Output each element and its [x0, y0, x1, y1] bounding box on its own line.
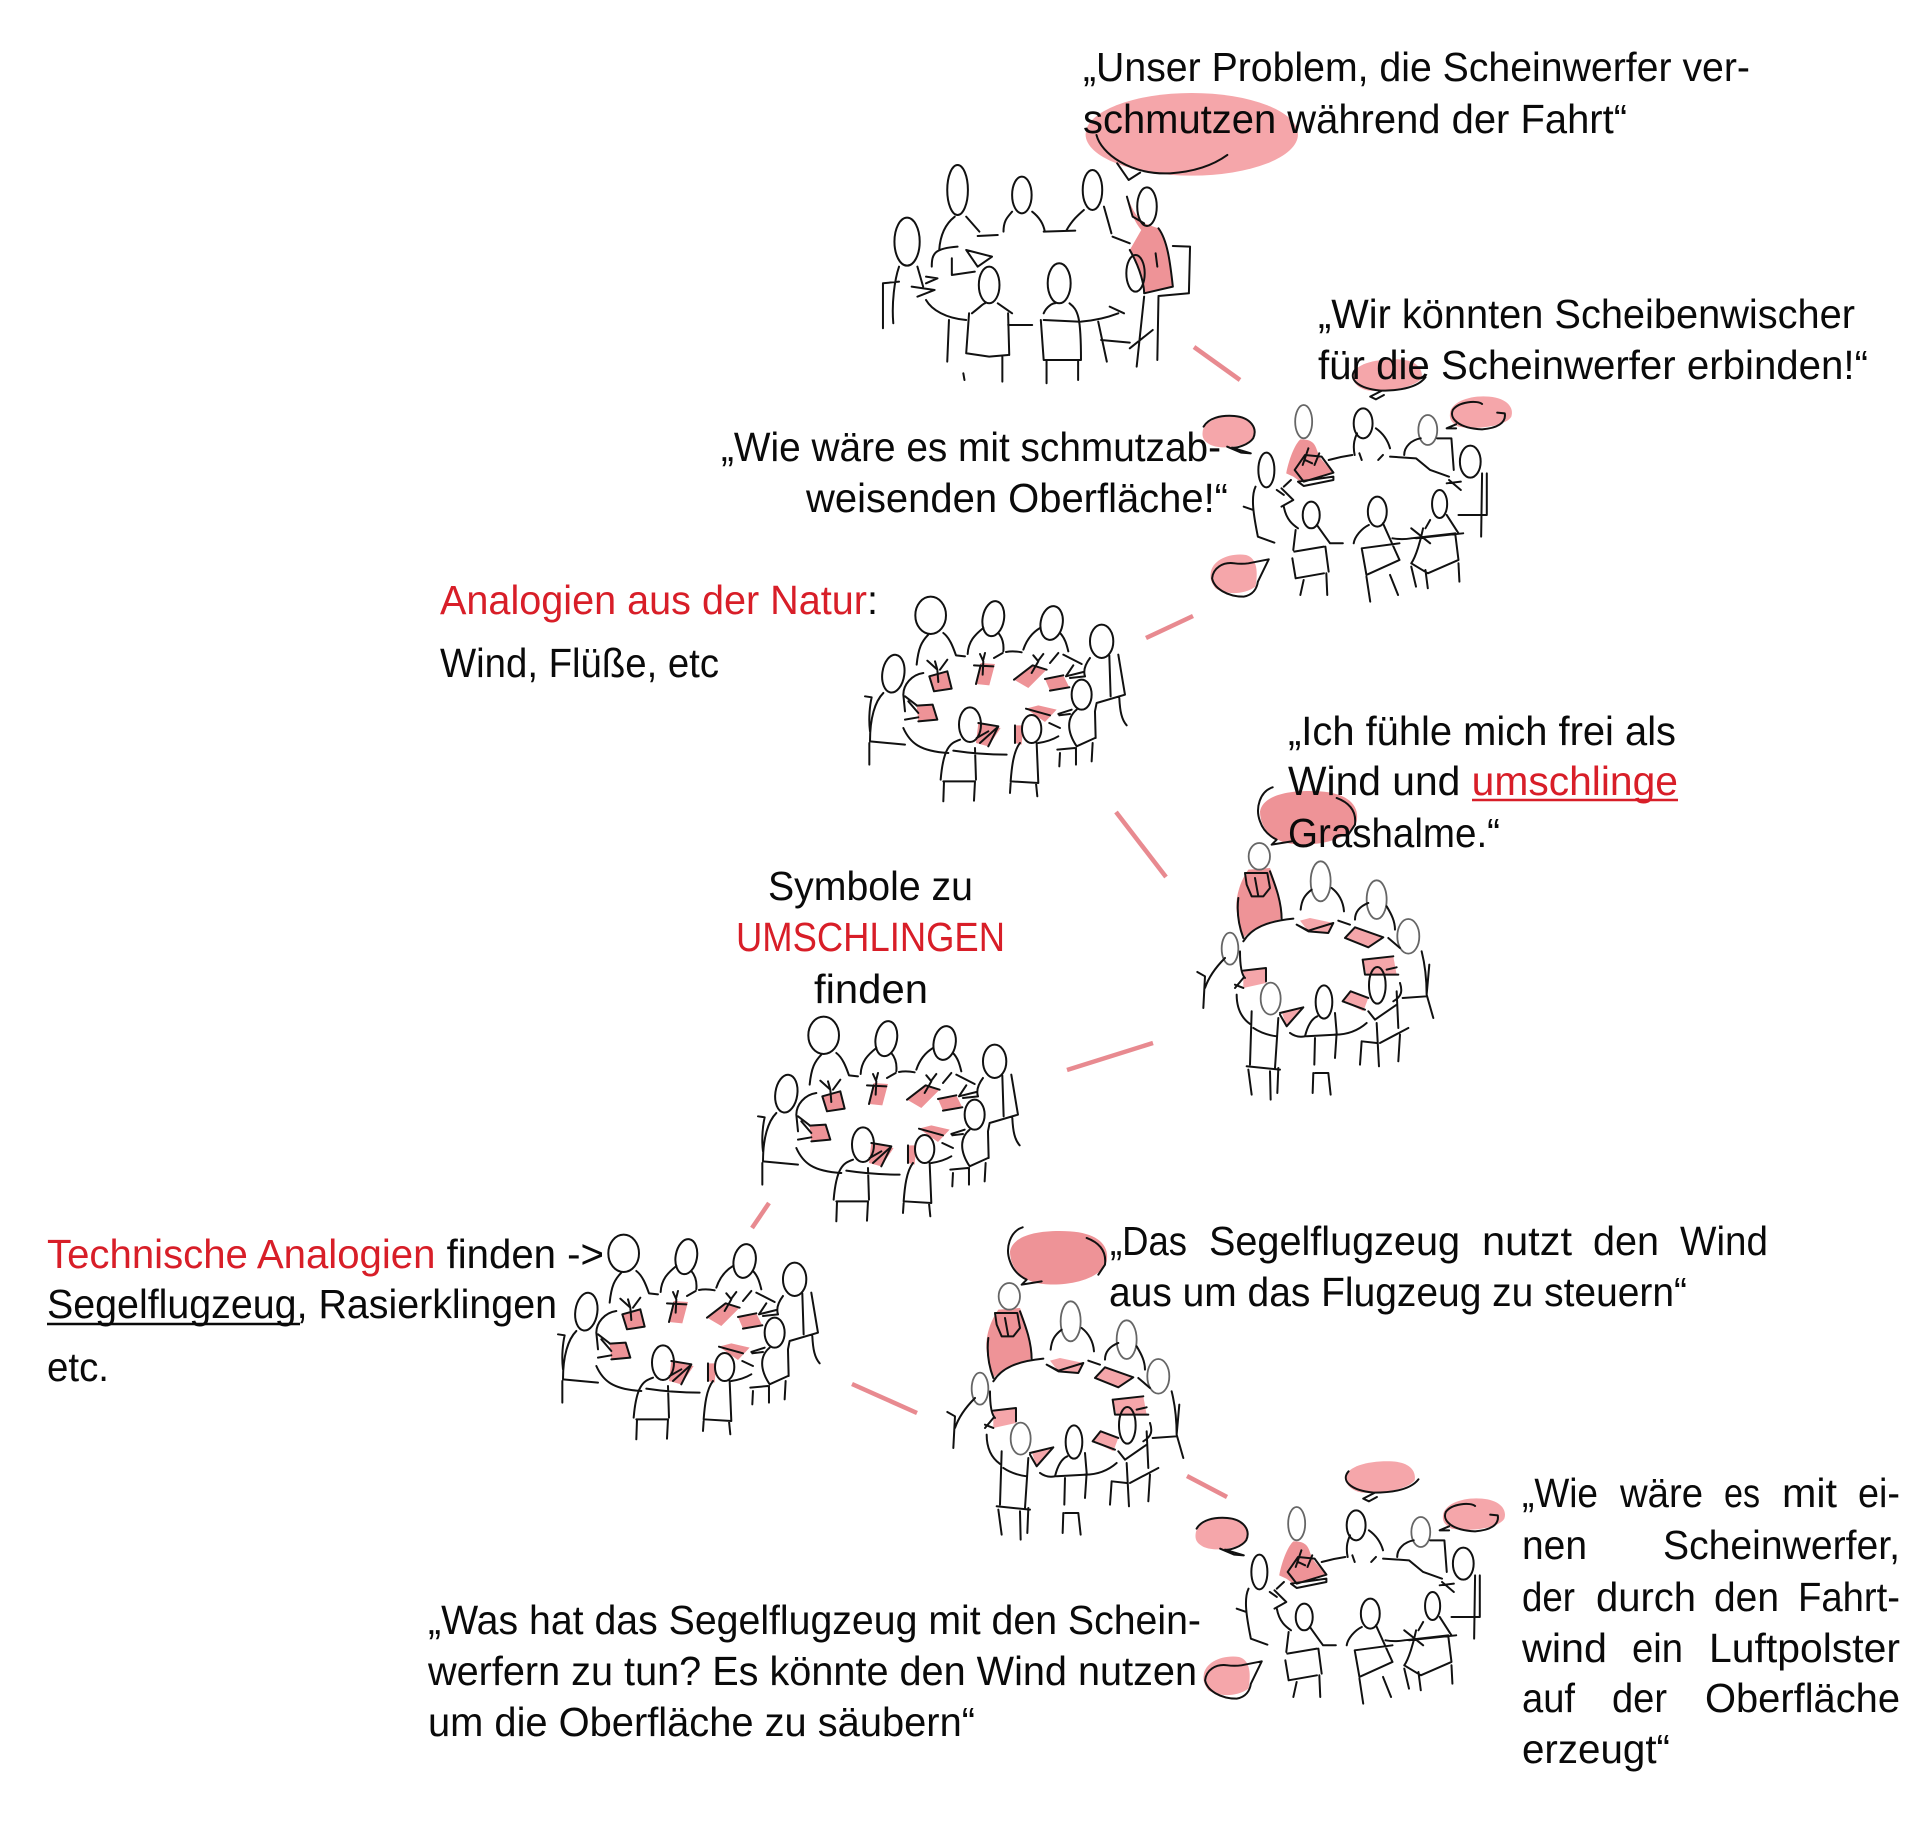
heading: symbols for umschlingen: finden [814, 966, 928, 1012]
quote: wind to clean the surface: um die Oberfläche zu säubern“ [428, 1699, 975, 1745]
quote: glider: „Das [1110, 1218, 1187, 1264]
quote: glider: nutzt [1482, 1218, 1573, 1264]
quote: air cushion idea: der [1522, 1574, 1575, 1620]
heading: technical analogies [47, 1231, 604, 1390]
quote: air cushion idea: mit [1782, 1470, 1838, 1516]
quote: wipers [1318, 291, 1868, 388]
quote: glider: aus um das Flugzeug zu steuern“ [1109, 1269, 1687, 1315]
quote: air cushion idea: auf [1522, 1675, 1576, 1721]
quote: air cushion idea: es [1724, 1470, 1760, 1516]
connector: step 4 to 5 [1067, 1043, 1153, 1070]
sketch: group with cards, symbols [758, 1017, 1020, 1221]
quote: air cushion idea: Oberfläche [1705, 1675, 1900, 1721]
quote: air cushion idea: Luftpolster [1709, 1625, 1900, 1671]
quote: problem statement [1083, 44, 1750, 142]
quote: wind to clean the surface [427, 1597, 1201, 1745]
quote: air cushion idea: „Wie [1522, 1470, 1598, 1516]
quote: dirt-repellent surface [721, 424, 1228, 521]
quote: feeling free as wind: Grashalme.“ [1288, 810, 1500, 856]
connector: step 3 to 4 [1116, 812, 1166, 877]
connector: step 7 to 8 [1187, 1476, 1227, 1497]
quote: glider [1109, 1218, 1768, 1315]
heading: natural analogies: Wind, Flüße, etc [440, 640, 719, 686]
quote: air cushion idea: wind [1521, 1625, 1607, 1671]
quote: dirt-repellent surface: „Wie wäre es mit schmutzab- [721, 424, 1221, 470]
heading: technical analogies: Technische Analogien finden -> [47, 1231, 604, 1277]
heading: symbols for umschlingen [736, 863, 1005, 1012]
quote: feeling free as wind [1288, 708, 1678, 856]
quote: wipers: für die Scheinwerfer erbinden!“ [1318, 342, 1868, 388]
heading: natural analogies [440, 577, 878, 686]
sketch: group with cards, technical analogies [558, 1235, 820, 1439]
quote: air cushion idea: erzeugt“ [1522, 1726, 1670, 1772]
quote: wipers: „Wir könnten Scheibenwischer [1318, 291, 1855, 337]
figures round a table [883, 165, 1190, 383]
quote: air cushion idea: ein [1632, 1625, 1683, 1671]
quote: air cushion idea: nen [1522, 1522, 1587, 1568]
sketch: speaker standing, personal analogy [1197, 787, 1433, 1100]
sketch: group with speaker stating the problem [883, 93, 1298, 383]
quote: glider: den [1593, 1218, 1659, 1264]
connector: step 1 to 2 [1194, 347, 1240, 380]
heading: natural analogies: Analogien aus der Natur: [440, 577, 878, 623]
quote: wind to clean the surface: „Was hat das Segelflugzeug mit den Schein- [428, 1597, 1201, 1643]
sketch: speaker standing, glider [947, 1227, 1183, 1540]
quote: air cushion idea [1521, 1470, 1900, 1772]
quote: wind to clean the surface: werfern zu tun? Es könnte den Wind nutzen [427, 1648, 1197, 1694]
quote: air cushion idea: ei- [1858, 1470, 1900, 1516]
quote: air cushion idea: Fahrt- [1798, 1574, 1900, 1620]
connector: step 6 to 7 [852, 1384, 917, 1413]
quote: feeling free as wind: Wind und umschlinge [1288, 758, 1678, 804]
sketch: group brainstorming, final ideas [1195, 1461, 1505, 1704]
sketch: group with cards, natural analogies [865, 597, 1127, 801]
quote: problem statement: schmutzen während der Fahrt“ [1083, 96, 1627, 142]
icon: speaker in red [1127, 195, 1173, 293]
heading: technical analogies: etc. [47, 1344, 109, 1390]
quote: air cushion idea: Scheinwerfer, [1663, 1522, 1900, 1568]
quote: feeling free as wind: „Ich fühle mich frei als [1288, 708, 1676, 754]
heading: symbols for umschlingen: UMSCHLINGEN [736, 914, 1005, 960]
quote: air cushion idea: den [1714, 1574, 1779, 1620]
connector: step 5 to 6 [752, 1203, 769, 1228]
quote: air cushion idea: der [1612, 1675, 1667, 1721]
icon: speech bubble [1086, 93, 1298, 180]
quote: air cushion idea: wäre [1619, 1470, 1703, 1516]
quote: glider: Wind [1680, 1218, 1768, 1264]
quote: problem statement: „Unser Problem, die Scheinwerfer ver- [1083, 44, 1750, 90]
connector: step 2 to 3 [1146, 616, 1193, 638]
quote: dirt-repellent surface: weisenden Oberfläche!“ [805, 475, 1228, 521]
sketch: group brainstorming with four speech bubbles [1202, 359, 1512, 602]
heading: symbols for umschlingen: Symbole zu [768, 863, 973, 909]
quote: glider: Segelflugzeug [1209, 1218, 1460, 1264]
quote: air cushion idea: durch [1596, 1574, 1696, 1620]
heading: technical analogies: Segelflugzeug, Rasierklingen [47, 1281, 557, 1327]
